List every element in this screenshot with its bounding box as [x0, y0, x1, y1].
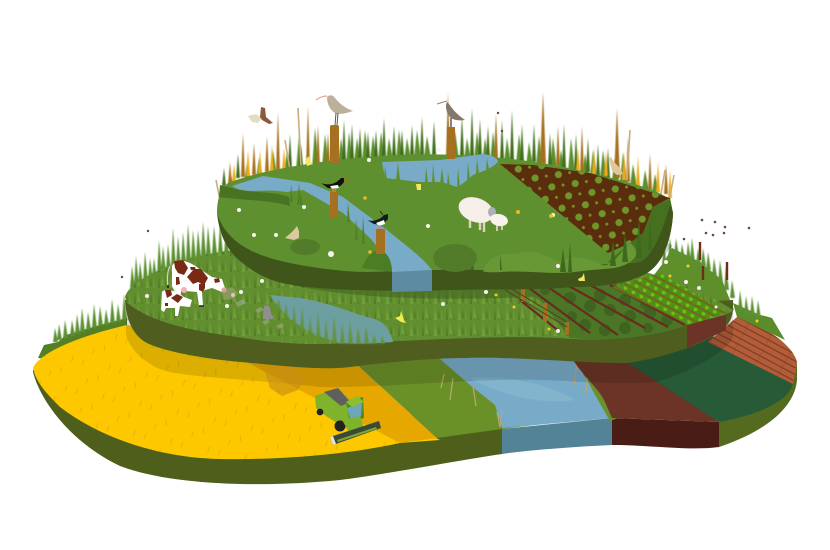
tan reed stalks	[216, 108, 674, 210]
sheep body	[455, 193, 497, 227]
cow udder	[181, 287, 187, 293]
back grass of middle tier	[130, 222, 235, 288]
tier 1: lower field layer	[33, 294, 797, 484]
pond reeds	[384, 158, 489, 188]
surface: amber crop strip	[205, 340, 437, 443]
side wall: right grassland section	[719, 362, 797, 447]
surface of middle tier	[125, 240, 733, 344]
surface: dark green strip	[600, 335, 793, 422]
post 3	[376, 229, 385, 254]
lamb	[489, 212, 509, 228]
reed stalks at riverbank	[441, 363, 588, 427]
side wall of upper tier	[217, 198, 673, 291]
harvester cab glass	[347, 403, 362, 421]
riverside reeds along the water	[428, 358, 618, 426]
sheep legs	[470, 220, 484, 232]
yellow flowers	[494, 264, 758, 330]
dark plant clumps	[540, 285, 673, 336]
river reeds	[290, 183, 365, 244]
surface: wheat texture	[33, 325, 400, 459]
surface: yellow crop field	[33, 325, 440, 459]
post 4	[447, 127, 455, 159]
shade on grass	[290, 239, 320, 255]
cow tail	[167, 266, 170, 287]
reeds overlapping the pond	[276, 300, 385, 344]
right bank with bush	[733, 303, 785, 340]
shadow cast by middle tier	[126, 300, 733, 387]
yellow flowers upper tier	[363, 196, 553, 254]
wheels	[317, 409, 346, 432]
godwit	[437, 101, 465, 127]
shade mound right of river	[433, 244, 477, 272]
calf body	[161, 290, 192, 316]
flowers	[237, 148, 560, 268]
surface: water strip	[418, 340, 612, 428]
bank behind the field: grass mound at left	[38, 294, 133, 360]
flying bird	[248, 107, 273, 124]
harvester cab	[346, 397, 364, 423]
sheep with lamb	[455, 193, 509, 232]
river on upper tier	[232, 176, 432, 272]
cow hooves	[168, 285, 204, 306]
insects over the right meadow	[121, 112, 750, 278]
oystercatcher	[321, 178, 349, 192]
header green reel	[337, 427, 377, 442]
shrub near the river	[362, 250, 392, 272]
quail on the field edge	[609, 157, 623, 175]
side wall: soil section	[612, 418, 719, 448]
flowers on the middle tier	[145, 260, 718, 333]
clouds of pale flower clumps	[222, 287, 238, 300]
post 2	[330, 192, 338, 218]
dark corner of the upper tier	[608, 199, 673, 262]
water section of upper wall	[392, 270, 432, 292]
combine harvester	[315, 388, 381, 445]
surface: terracotta strip	[708, 317, 797, 384]
cow brown spots	[174, 260, 220, 292]
lamb legs	[497, 224, 502, 231]
fence posts	[521, 288, 569, 335]
stones path on meadow	[235, 299, 284, 329]
lighter bush shapes	[483, 243, 636, 274]
reeds on the right meadow	[662, 238, 761, 318]
cow body	[172, 261, 225, 306]
back reeds orange	[232, 144, 672, 198]
surface of upper tier	[217, 154, 670, 272]
furrows	[520, 285, 685, 335]
butterflies	[305, 156, 585, 281]
calf spots	[165, 290, 183, 306]
back reeds green	[222, 108, 610, 186]
soil section of middle wall	[687, 315, 726, 348]
ghost wheat icon on amber field	[265, 364, 306, 396]
header bar	[330, 421, 381, 445]
post 1	[330, 125, 339, 163]
fence rails	[505, 285, 567, 327]
hare	[263, 304, 273, 319]
darker bank mound left	[219, 185, 290, 206]
header tip	[330, 436, 336, 445]
fence posts with birds	[248, 95, 623, 254]
vegetable plot	[505, 285, 687, 339]
harvester cab top	[346, 396, 364, 407]
tier 3: upper wetland layer	[216, 92, 674, 292]
plot bed	[510, 285, 687, 339]
harvester body	[315, 388, 352, 428]
tier 2: middle meadow layer	[125, 222, 761, 368]
pond on middle tier	[270, 295, 393, 344]
cattails on the right meadow	[700, 242, 727, 280]
soil field with seedlings	[500, 164, 670, 253]
side wall of middle tier	[125, 300, 733, 368]
cow muzzle	[221, 287, 227, 293]
front reed clumps	[456, 218, 652, 272]
back meadow on the right	[650, 248, 734, 325]
sheep head	[488, 207, 496, 217]
curlew	[316, 95, 353, 125]
side wall: water section	[502, 418, 612, 454]
partridge on grass	[285, 226, 299, 240]
feeder neck	[342, 416, 364, 434]
shadow below upper tier	[225, 230, 672, 299]
back reeds dense green	[228, 128, 659, 192]
butterfly on middle tier	[395, 311, 406, 323]
side wall: earth band along the front	[33, 370, 502, 484]
harvester roof	[324, 388, 350, 406]
pond on upper tier	[382, 154, 498, 187]
surface: lighter water highlights	[470, 377, 575, 401]
lapwing	[367, 211, 388, 229]
bright crop plot	[612, 273, 727, 325]
large cow	[167, 260, 227, 306]
calf	[161, 290, 192, 316]
dark green front band	[440, 205, 673, 290]
back reeds brown	[228, 92, 668, 194]
surface: green strip	[330, 340, 615, 438]
surface: bare soil strip	[560, 340, 719, 422]
